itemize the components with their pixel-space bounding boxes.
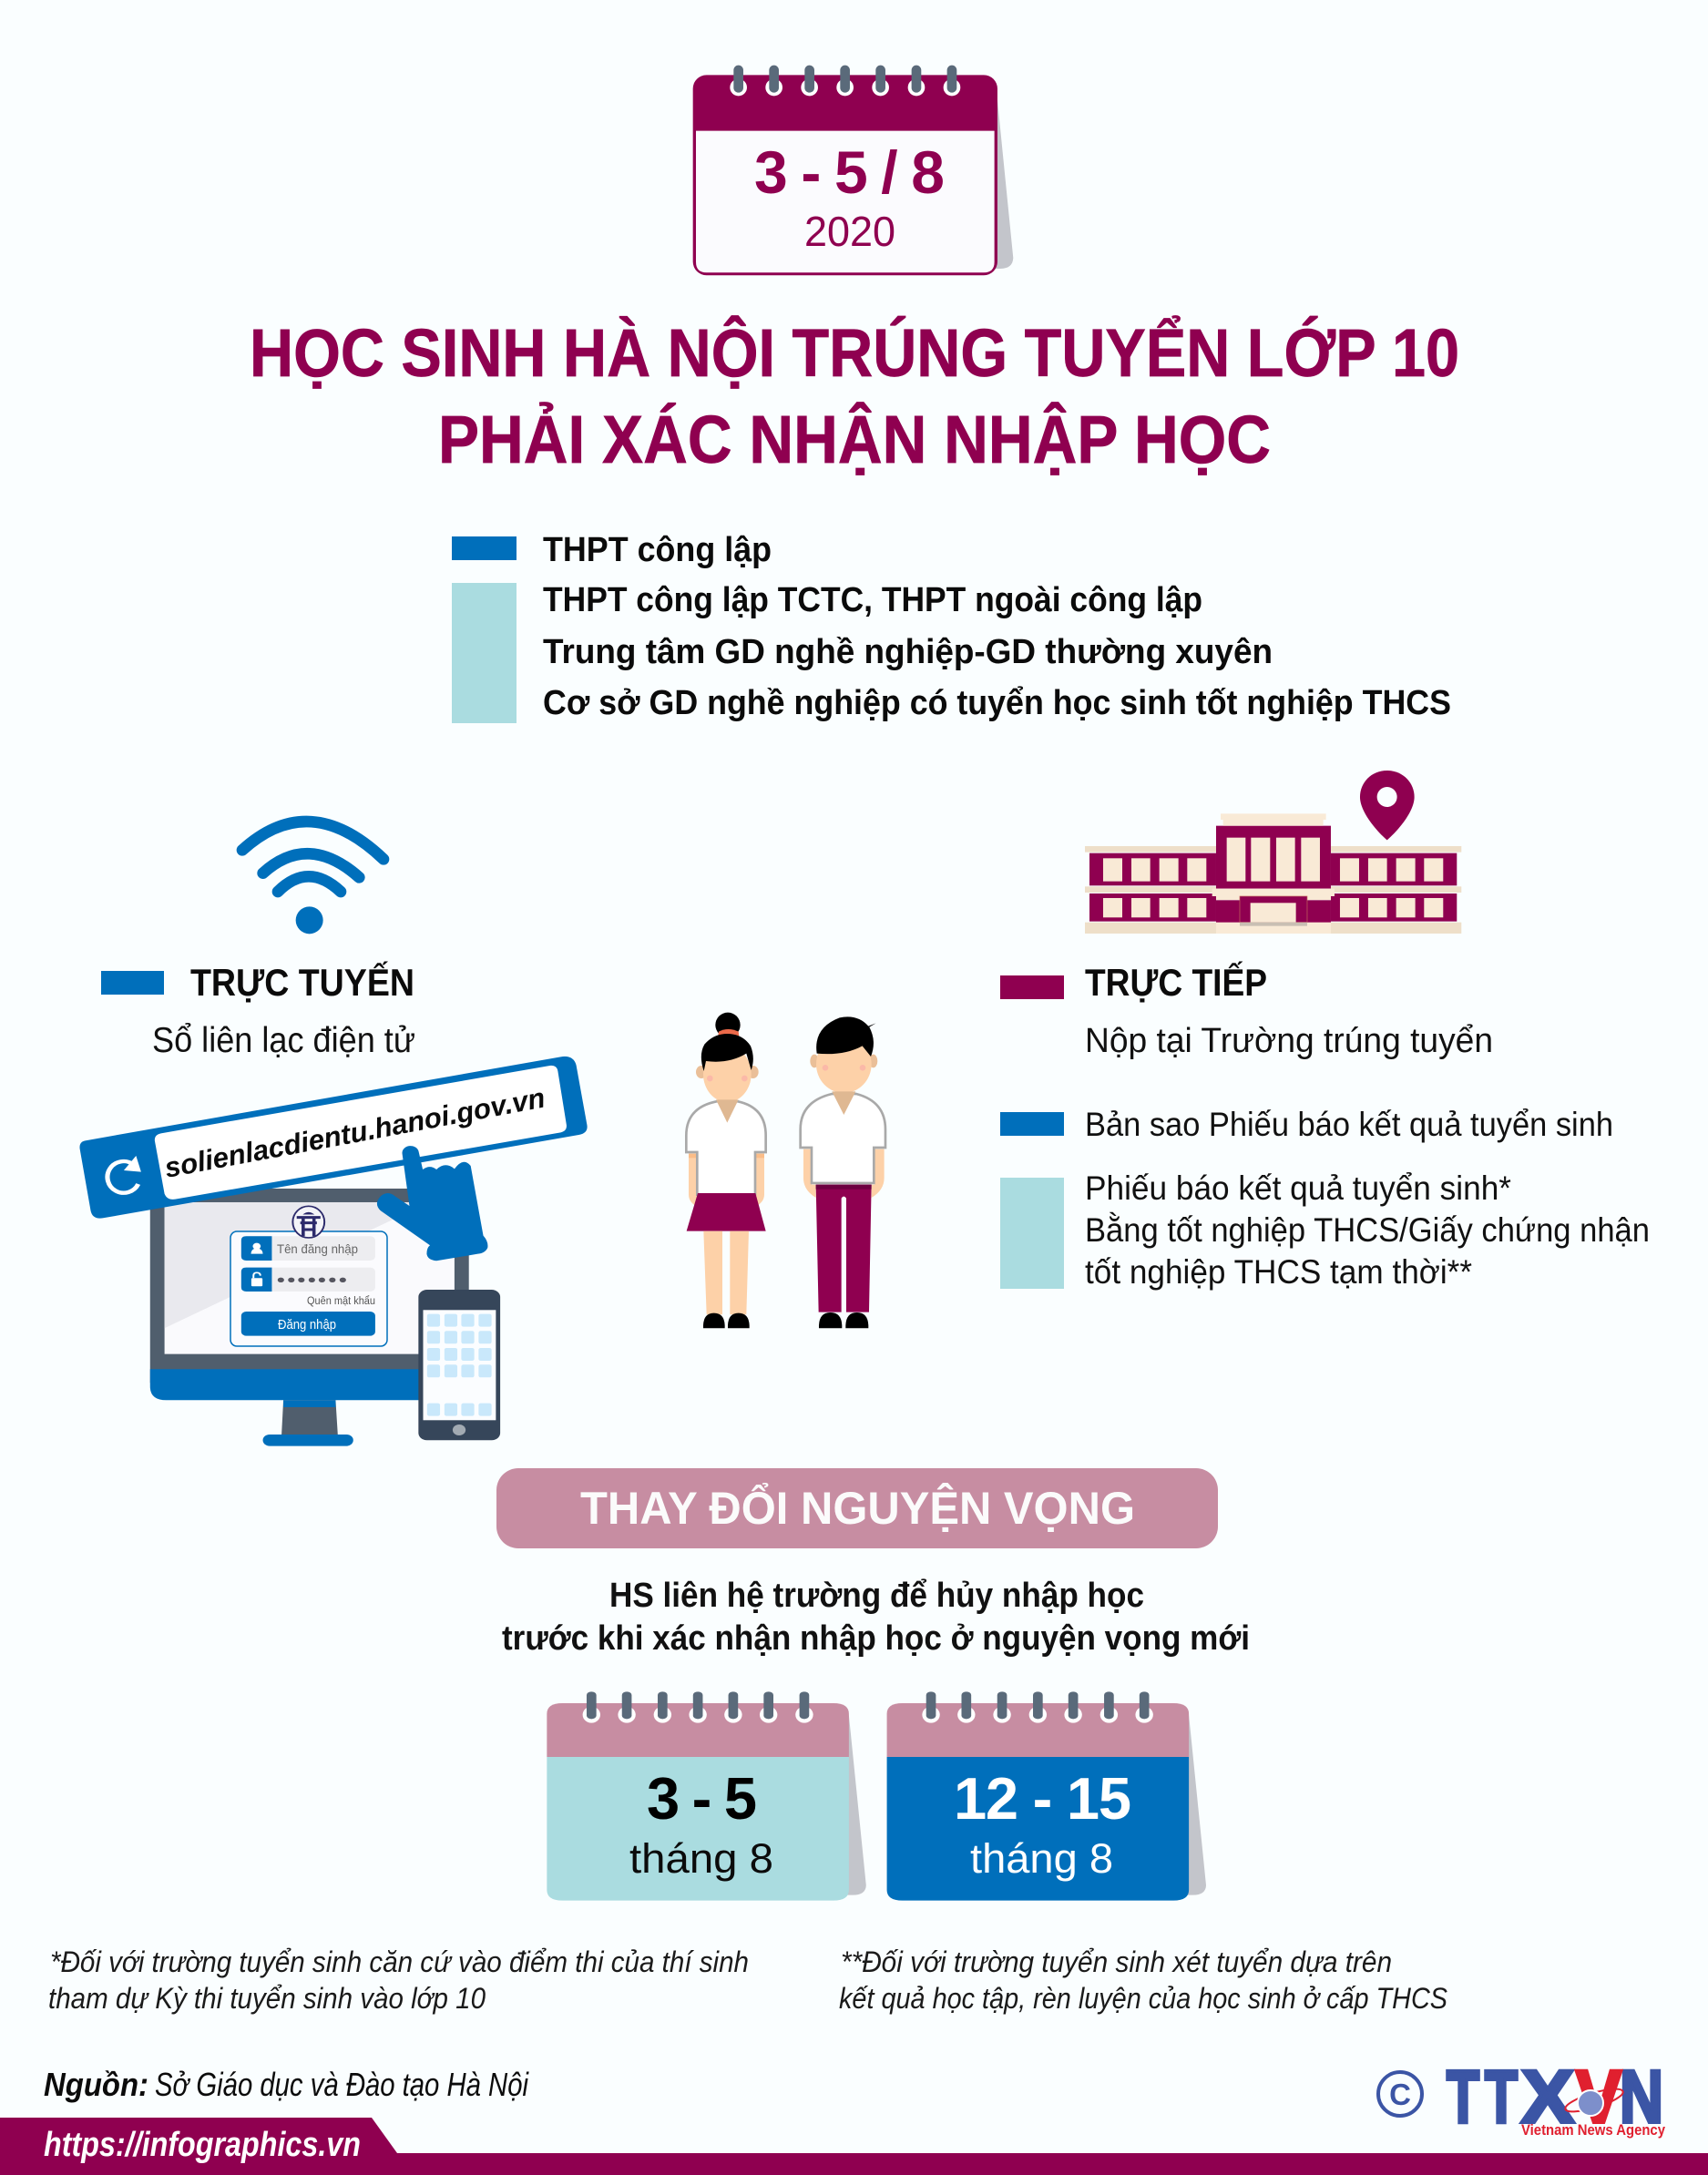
url bar [80, 1057, 588, 1219]
footer band with url: https://infographics.vn [44, 2126, 361, 2164]
icon: calendar 3-5 august: 3 - 5 [647, 1765, 757, 1832]
url bar: solienlacdientu.hanoi.gov.vn [162, 1081, 547, 1184]
title: HỌC SINH HÀ NỘI TRÚNG TUYỂN LỚP 10 [250, 315, 1459, 391]
login form: Đăng nhập [278, 1318, 336, 1333]
banner: change of preference: THAY ĐỔI NGUYỆN VỌNG [580, 1482, 1135, 1534]
footnote right: kết quả học tập, rèn luyện của học sinh ở cấp THCS [839, 1982, 1447, 2015]
banner: change of preference [496, 1468, 1218, 1548]
title [250, 315, 1459, 477]
login form: Tên đăng nhập [277, 1241, 358, 1256]
logo: TTXVN copyright: N [1620, 2056, 1663, 2139]
instruction text: trước khi xác nhận nhập học ở nguyện vọng mới [502, 1619, 1250, 1658]
illustration: students [686, 1013, 885, 1328]
icon: calendar 12-15 august [887, 1691, 1206, 1901]
legend: school types: Cơ sở GD nghề nghiệp có tuyển học sinh tốt nghiệp THCS [543, 684, 1451, 722]
footnote right [839, 1945, 1447, 2015]
source: Nguồn: [44, 2066, 148, 2103]
legend: school types [452, 531, 1451, 723]
in-person list: other schools documents: tốt nghiệp THCS tạm thời** [1085, 1253, 1472, 1291]
instruction text: HS liên hệ trường để hủy nhập học [609, 1577, 1144, 1615]
online heading: TRỰC TUYẾN [190, 961, 414, 1004]
logo: TTXVN copyright: T [1485, 2056, 1518, 2139]
instruction text [502, 1577, 1250, 1658]
logo: TTXVN copyright: X [1521, 2056, 1574, 2139]
login form [230, 1231, 387, 1346]
footer band with url [0, 2118, 1708, 2175]
legend: school types: THPT công lập TCTC, THPT ngoài công lập [543, 581, 1202, 619]
in-person heading: Nộp tại Trường trúng tuyển [1085, 1022, 1493, 1060]
in-person list: other schools documents: Phiếu báo kết quả tuyển sinh* [1085, 1169, 1511, 1207]
logo: TTXVN copyright [1378, 2056, 1665, 2139]
source [44, 2066, 529, 2103]
icon: calendar 3-5 august [547, 1691, 866, 1901]
in-person list: other schools documents [1000, 1169, 1650, 1291]
login form: Quên mật khẩu [307, 1296, 375, 1307]
icon: school building with location pin [1085, 771, 1461, 934]
footnote left: tham dự Kỳ thi tuyển sinh vào lớp 10 [48, 1982, 486, 2015]
footnote left: *Đối với trường tuyển sinh căn cứ vào điểm thi của thí sinh [50, 1945, 749, 1978]
online heading: Sổ liên lạc điện tử [152, 1021, 415, 1060]
illustration: computer, url bar and phone [80, 1057, 588, 1446]
in-person list: other schools documents: Bằng tốt nghiệp THCS/Giấy chứng nhận [1085, 1211, 1650, 1249]
icon: pointing hand [377, 1146, 487, 1261]
in-person heading [1000, 961, 1493, 1060]
title: PHẢI XÁC NHẬN NHẬP HỌC [438, 402, 1271, 477]
icon: wifi [242, 822, 384, 934]
icon: calendar 12-15 august: 12 - 15 [954, 1765, 1131, 1832]
icon: desktop monitor [150, 1189, 469, 1446]
source: Sở Giáo dục và Đào tạo Hà Nội [155, 2066, 529, 2103]
figure: girl [686, 1013, 766, 1328]
logo: TTXVN copyright: V [1576, 2056, 1621, 2139]
in-person list: public schools document: Bản sao Phiếu báo kết quả tuyển sinh [1085, 1106, 1613, 1143]
icon: hanoi emblem [292, 1206, 324, 1238]
figure: boy [801, 1016, 885, 1328]
icon: calendar 12-15 august: tháng 8 [970, 1835, 1113, 1882]
in-person heading: TRỰC TIẾP [1085, 961, 1267, 1004]
legend: school types: Trung tâm GD nghề nghiệp-GD thường xuyên [543, 633, 1273, 671]
online heading [101, 961, 415, 1060]
footnote right: **Đối với trường tuyển sinh xét tuyển dựa trên [841, 1945, 1392, 1978]
icon: main date calendar: 3 - 5 / 8 [754, 138, 945, 206]
footnote left [48, 1945, 749, 2015]
icon: calendar 3-5 august: tháng 8 [629, 1835, 773, 1882]
icon: main date calendar [693, 66, 1013, 275]
icon: main date calendar: 2020 [804, 208, 895, 255]
logo: TTXVN copyright: T [1447, 2056, 1479, 2139]
logo: TTXVN copyright: C [1389, 2078, 1411, 2111]
logo: TTXVN copyright: Vietnam News Agency [1521, 2121, 1665, 2139]
icon: smartphone [418, 1290, 500, 1440]
legend: school types: THPT công lập [543, 531, 772, 569]
